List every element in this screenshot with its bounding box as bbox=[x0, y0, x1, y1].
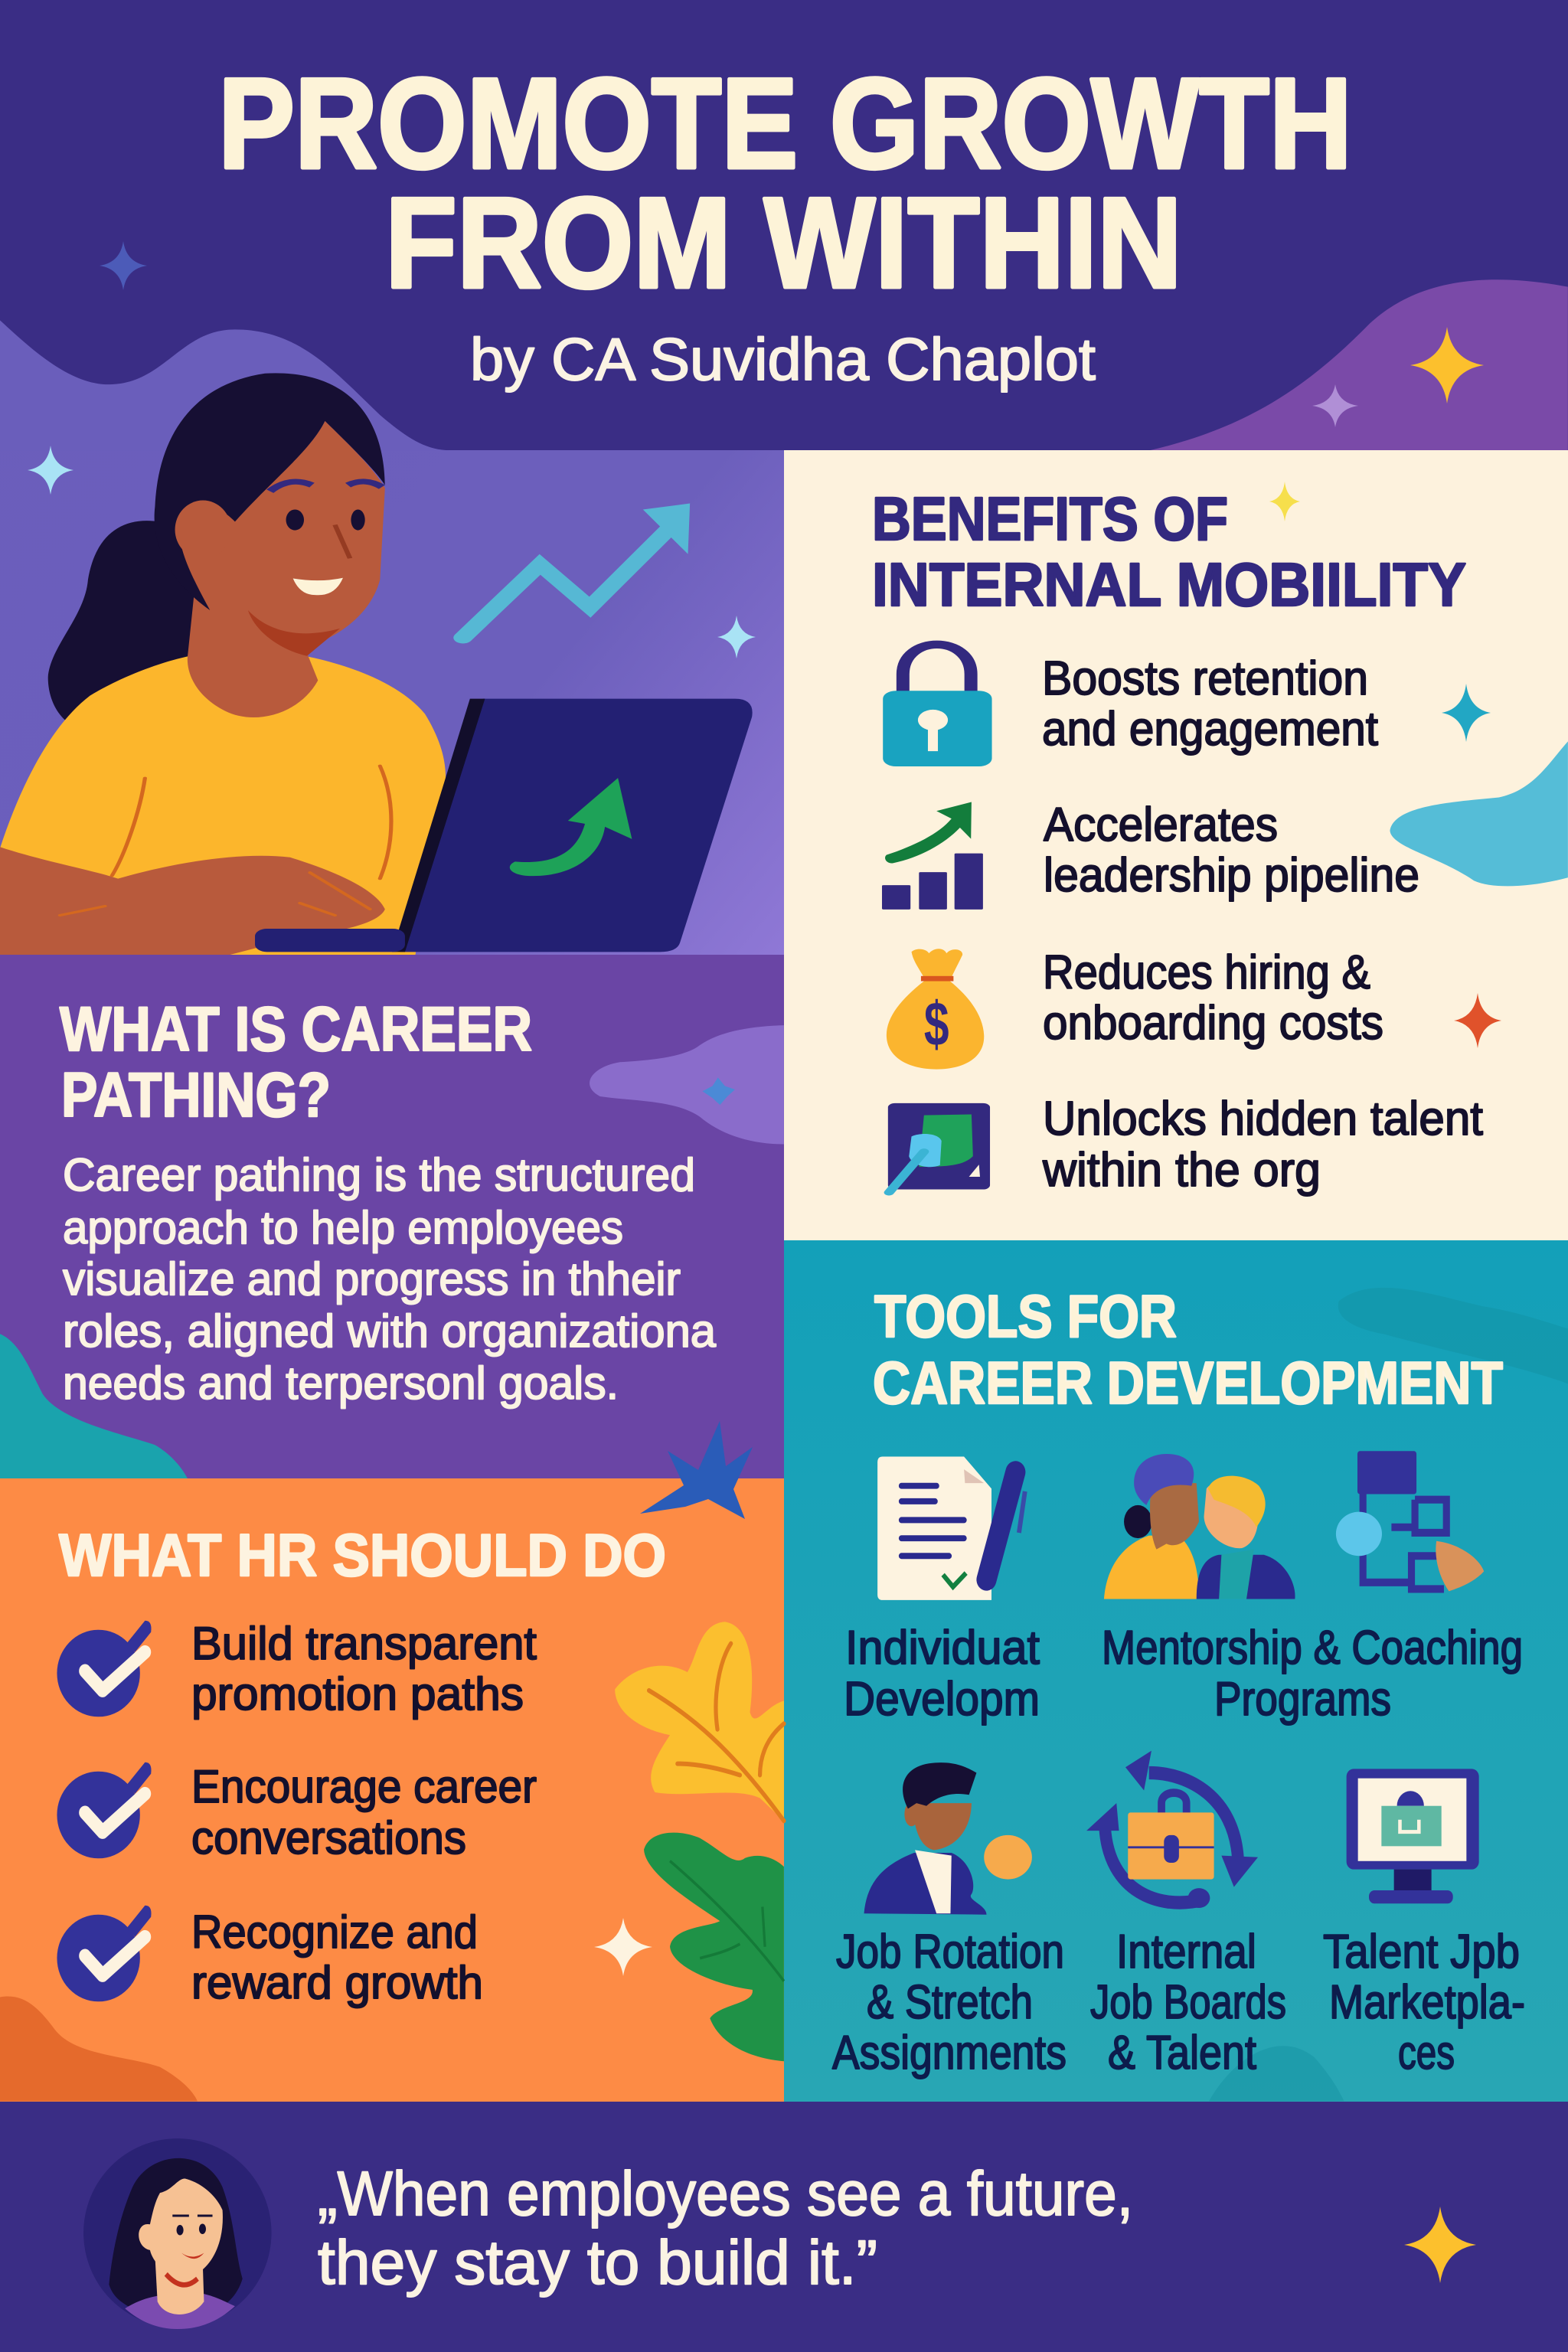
text: accelerates: Accelerates bbox=[1044, 799, 1278, 851]
checklist item 3: Recognize and bbox=[191, 1906, 478, 1958]
heading: WHAT IS CAREER bbox=[60, 995, 532, 1064]
paragraph: needs and terpersonl goals. bbox=[63, 1357, 619, 1409]
decorative teal blob bbox=[0, 1334, 188, 1478]
heading bbox=[872, 485, 1466, 619]
paragraph: visualize and progress in thheir bbox=[63, 1253, 681, 1305]
quote: they stay to build it.” bbox=[318, 2228, 877, 2298]
label: talent marketplaces bbox=[1323, 1926, 1525, 2079]
icon: monitor marketplace bbox=[1347, 1769, 1479, 1903]
label: internal job boards: Job Boards bbox=[1090, 1976, 1286, 2029]
stars bbox=[1269, 482, 1501, 1048]
panel: benefits of internal mobility bbox=[784, 450, 1568, 1240]
arm and hand bbox=[0, 847, 385, 957]
icon: person with speech bubble bbox=[864, 1762, 1032, 1915]
ear bbox=[175, 501, 231, 559]
label: individual development: Individuat bbox=[845, 1622, 1040, 1674]
label: internal job boards: & Talent bbox=[1108, 2027, 1256, 2079]
decorative blue splash star bbox=[640, 1421, 753, 1519]
heading: TOOLS FOR bbox=[874, 1282, 1177, 1350]
label: internal job boards bbox=[1090, 1926, 1286, 2079]
label: job rotation: Job Rotation bbox=[836, 1926, 1064, 1978]
title: FROM WITHIN bbox=[385, 171, 1182, 315]
heading: BENEFITS OF bbox=[872, 485, 1228, 553]
quote bbox=[318, 2159, 1133, 2298]
checklist item 3: reward growth bbox=[191, 1957, 483, 2008]
panel: tools for career development bbox=[784, 1240, 1568, 2102]
icon: money bag: $ bbox=[924, 990, 949, 1060]
text: boosts retention: Boosts retention bbox=[1042, 652, 1368, 705]
illustration: woman at laptop with growth arrow bbox=[0, 373, 753, 957]
leaves bbox=[615, 1622, 784, 2061]
icon: money bag bbox=[887, 949, 984, 1070]
icon: development plan document and pen bbox=[877, 1457, 1025, 1600]
label: talent marketplaces: Marketpla- bbox=[1329, 1976, 1525, 2029]
title: PROMOTE GROWTH bbox=[218, 51, 1352, 195]
icon: yellow star bbox=[1404, 2207, 1476, 2283]
text: accelerates bbox=[1044, 799, 1419, 902]
heading bbox=[60, 995, 532, 1130]
checklist item 1: Build transparent bbox=[191, 1618, 537, 1669]
panel: what HR should do bbox=[0, 1478, 784, 2102]
laptop bbox=[255, 699, 753, 952]
star bbox=[594, 1918, 652, 1976]
label: talent marketplaces: Talent Jpb bbox=[1323, 1926, 1520, 1978]
icon: author avatar bbox=[83, 2138, 272, 2329]
label: mentorship and coaching bbox=[1102, 1622, 1523, 1726]
paragraph: Career pathing is the structured bbox=[63, 1149, 695, 1200]
label: individual development bbox=[844, 1622, 1040, 1726]
paragraph: roles, aligned with organizationa bbox=[63, 1305, 717, 1357]
checklist item 2 bbox=[57, 1761, 537, 1864]
decorative blob bbox=[1390, 741, 1568, 886]
label: mentorship and coaching: Programs bbox=[1214, 1673, 1391, 1726]
decorative blob with star bbox=[590, 1025, 784, 1144]
icon: hidden talent screen bbox=[888, 1103, 990, 1193]
label: internal job boards: Internal bbox=[1116, 1926, 1256, 1978]
subtitle: author: by CA Suvidha Chaplot bbox=[470, 325, 1096, 393]
heading: INTERNAL MOBIILITY bbox=[872, 550, 1466, 619]
icon: rising arrow bbox=[463, 504, 690, 638]
panel: what is career pathing bbox=[0, 955, 784, 1478]
title bbox=[218, 51, 1352, 315]
label: individual development: Developm bbox=[844, 1673, 1040, 1726]
text: reduces hiring: Reduces hiring & bbox=[1043, 946, 1370, 999]
decorative dark orange hill bbox=[0, 1997, 198, 2102]
icon: check badge bbox=[57, 1906, 152, 2001]
paragraph: approach to help employees bbox=[63, 1202, 623, 1253]
icon: org chart path bbox=[1336, 1451, 1484, 1591]
icon: check badge bbox=[57, 1762, 152, 1858]
text: reduces hiring: onboarding costs bbox=[1043, 997, 1383, 1050]
panel: footer quote band bbox=[0, 2102, 1568, 2352]
text: unlocks hidden talent: within the org bbox=[1042, 1144, 1321, 1197]
panel: hero background bbox=[0, 0, 784, 955]
checklist item 3 bbox=[57, 1906, 483, 2008]
text: unlocks hidden talent: Unlocks hidden talent bbox=[1043, 1093, 1483, 1145]
decorative blobs bbox=[1209, 1288, 1568, 2101]
icon: check badge bbox=[57, 1621, 152, 1717]
heading: WHAT HR SHOULD DO bbox=[59, 1521, 666, 1589]
label: job rotation: Assignments bbox=[832, 2027, 1067, 2079]
icon: padlock bbox=[883, 645, 992, 766]
text: boosts retention: and engagement bbox=[1042, 703, 1378, 756]
checklist item 1 bbox=[57, 1618, 537, 1720]
heading bbox=[873, 1282, 1503, 1416]
icon: bar chart with arrow bbox=[882, 802, 983, 910]
icon: mentorship pair bbox=[1104, 1454, 1295, 1599]
paragraph bbox=[63, 1149, 717, 1409]
quote: „When employees see a future, bbox=[318, 2159, 1133, 2229]
panel: header band bbox=[0, 0, 1568, 450]
label: job rotation: & Stretch bbox=[867, 1976, 1033, 2029]
text: reduces hiring bbox=[1043, 946, 1383, 1050]
checklist item 2: Encourage career bbox=[191, 1761, 537, 1812]
face features bbox=[270, 482, 382, 595]
label: job rotation bbox=[832, 1926, 1067, 2079]
jaw shadow bbox=[248, 610, 340, 656]
ponytail bbox=[48, 521, 215, 720]
icon: rotating arrows and briefcase bbox=[1086, 1751, 1258, 1908]
hair bbox=[155, 373, 385, 610]
shirt bbox=[0, 656, 446, 957]
text: unlocks hidden talent bbox=[1042, 1093, 1483, 1197]
checklist item 1: promotion paths bbox=[191, 1668, 524, 1720]
label: talent marketplaces: ces bbox=[1398, 2027, 1455, 2079]
heading: PATHING? bbox=[61, 1060, 331, 1130]
text: accelerates: leadership pipeline bbox=[1044, 849, 1419, 902]
neck and face bbox=[179, 421, 385, 717]
text: boosts retention bbox=[1042, 652, 1378, 756]
checklist item 2: conversations bbox=[191, 1812, 466, 1864]
header stars bbox=[28, 241, 1484, 658]
